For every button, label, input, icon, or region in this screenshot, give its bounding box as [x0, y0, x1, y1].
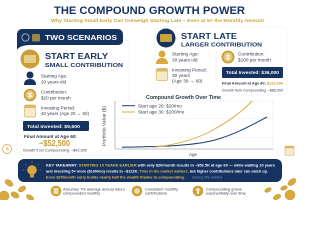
text: starting age: Starting Age: [172, 52, 199, 56]
text: starting age: 20 years old [41, 80, 66, 84]
footnote: compounding: exponentially over time [206, 191, 246, 196]
text: contribution: $100 per month [238, 58, 271, 62]
footnote: contributions: contributions [145, 191, 167, 196]
final amount: Final Amount at Age 60: $122,000 [222, 80, 283, 86]
takeaway text: KEY TAKEAWAY: STARTING 10 YEARS EARLIER with only $20/month results in ~$52.5K at age 60 — while waiting 10 years [46, 163, 271, 167]
text: investing period: Investing Period: [172, 68, 207, 72]
faint note: Saving lifts started [192, 175, 222, 179]
text: starting age: Starting Age: [41, 74, 67, 78]
icon: calendar right [285, 146, 294, 156]
icon: calendar [156, 68, 168, 80]
panel: key takeaway [18, 159, 282, 182]
icon: clock [22, 34, 29, 41]
heading: start late: START LATE [181, 31, 237, 41]
subheading: LARGER CONTRIBUTION [181, 42, 262, 48]
final amount value: ~$52,500 [39, 139, 71, 148]
text: investing period: (Age 30 → 60) [172, 78, 203, 84]
legend: Start age 30: $100/mo [138, 110, 185, 115]
subtitle: Why Starting Small Early Can Outweigh Starting Late – Even at 5× the Monthly Amount [51, 18, 265, 23]
legend: Start age 20: $20/mo [138, 103, 182, 108]
icon: coin stack [132, 186, 142, 196]
footnote: contributions [132, 186, 178, 196]
icon: navy coins [156, 28, 176, 48]
title: THE COMPOUND GROWTH POWER [54, 5, 245, 17]
total invested bar: Total Invested: $9,600 [27, 124, 81, 129]
footnote: assumption [51, 186, 125, 196]
icon: up arrow [193, 186, 203, 196]
chart: compound growth over time [102, 95, 273, 157]
icon: gold coins [20, 50, 40, 68]
plot area [115, 101, 273, 149]
footnote: contributions: Consistent monthly [145, 186, 178, 191]
total invested bar: Total Invested: $36,000 [226, 70, 280, 75]
text: investing period: 40 years (Age 20 → 60) [41, 111, 89, 116]
x axis label: Age [189, 152, 197, 157]
icon: calendar [32, 34, 40, 42]
panel: start early [17, 39, 129, 155]
text: investing period: 30 years [172, 73, 191, 78]
icon: person [24, 72, 36, 85]
footnote: assumption: Assumes 7% average annual return [63, 186, 125, 191]
takeaway text: and investing 5× more ($100/mo) results in ~$122K. Time in the market matters, but higher contributions later can catch up. [46, 169, 268, 173]
legend [122, 103, 185, 115]
icon: clock outline [2, 144, 12, 154]
final amount label: Final Amount at Age 60: [24, 134, 78, 139]
text: contribution: Contribution: [238, 52, 265, 56]
icon: coin: $ [28, 92, 32, 100]
icon: coin: $ [226, 54, 230, 62]
growth from compounding: Growth from Compounding: ~$42,900 [23, 148, 87, 152]
footnote: compounding: Compounding grows [206, 186, 242, 191]
panel: two scenarios header [17, 29, 123, 50]
panel: start late [155, 27, 287, 95]
vertical divider [215, 52, 217, 80]
icon: light bulb [23, 162, 41, 178]
text: starting age: 30 years old [172, 58, 198, 62]
footnote: compounding [193, 186, 246, 196]
gold line: start age 30 [153, 101, 252, 147]
subheading: SMALL CONTRIBUTION [45, 63, 123, 69]
heading: two scenarios: TWO SCENARIOS [45, 33, 117, 42]
text: contribution: $20 per month [41, 96, 71, 100]
text: contribution: Contribution: [41, 90, 67, 94]
chart title: Compound Growth Over Time [146, 95, 221, 101]
y axis label: Portfolio Value ($) [102, 105, 106, 146]
text: investing period: Investing Period: [41, 106, 75, 110]
icon: coins left [0, 178, 35, 201]
icon: coins right [264, 177, 297, 201]
icon: calendar [24, 105, 36, 117]
icon: person [156, 50, 168, 64]
heading: start early: START EARLY [45, 51, 108, 61]
navy line: start age 20 [122, 117, 267, 147]
takeaway text: Even $20/month early builds nearly half the wealth thanks to compounding. [46, 175, 185, 179]
icon: percent badge [51, 186, 61, 196]
growth from compounding: Growth from Compounding: ~$86,000 [222, 88, 283, 92]
footnote: assumption: compounded monthly [63, 191, 100, 196]
